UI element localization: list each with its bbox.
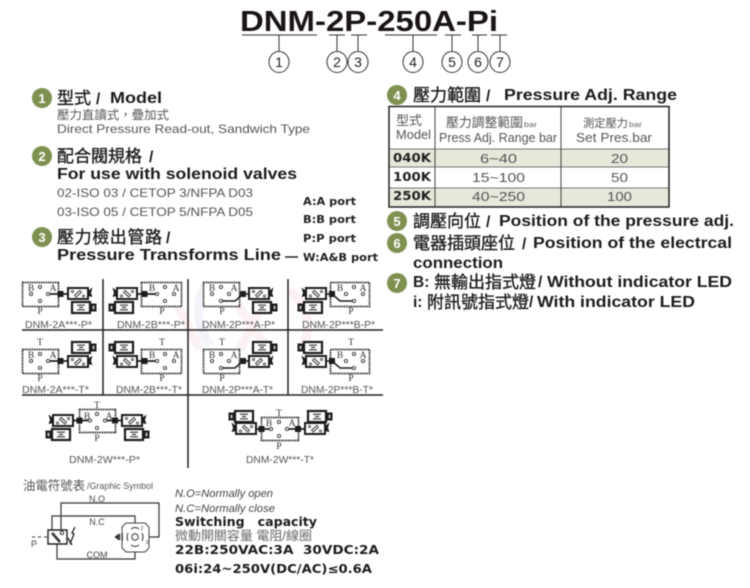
section 6: electrical connection: Position of the electrcal bbox=[533, 235, 732, 252]
row 040K: 20 bbox=[611, 151, 628, 166]
note: normally open: N.O=Normally open bbox=[175, 488, 273, 500]
diagram: DNM-2A-P bbox=[22, 282, 96, 331]
diagram: DNM-2P-B-P: B bbox=[337, 284, 343, 294]
diagram: DNM-2W-P: T bbox=[94, 401, 100, 411]
section 3: pressure line bbox=[32, 227, 298, 264]
circuit diagram: 3 bbox=[146, 540, 149, 546]
row 250K bbox=[393, 189, 632, 204]
row 100K: 15~100 bbox=[472, 170, 525, 185]
port legend: P:P port bbox=[303, 233, 356, 245]
row 040K: 040K bbox=[393, 151, 432, 165]
table header: 型式 bbox=[396, 113, 422, 128]
code breakdown callouts: 4 bbox=[409, 54, 417, 70]
code breakdown callouts: 1 bbox=[275, 54, 283, 70]
diagram: DNM-2P-A-T: DNM-2P***A-T* bbox=[202, 385, 273, 396]
badge 5: 5 bbox=[393, 214, 401, 229]
spec: 22B: 22B:250VAC:3A 30VDC:2A bbox=[175, 543, 380, 557]
diagram: DNM-2P-A-T: P bbox=[219, 374, 225, 384]
diagram: DNM-2P-A-P: B bbox=[209, 284, 215, 294]
diagram: DNM-2P-B-P bbox=[298, 282, 375, 331]
heading: valve spec english: For use with solenoid valves bbox=[57, 166, 297, 183]
diagram: DNM-2P-A-P bbox=[202, 282, 278, 331]
section 5: adjustment position bbox=[387, 211, 734, 231]
heading: slash: / bbox=[149, 149, 154, 166]
note: normally close: N.C=Normally close bbox=[175, 503, 275, 515]
diagram: DNM-2B-T: T bbox=[159, 338, 165, 348]
graphic symbol heading: 油電符號表 bbox=[23, 478, 85, 493]
section 7: indicator LED: i: bbox=[413, 294, 422, 311]
diagram: DNM-2W-T: A bbox=[289, 419, 296, 429]
diagram: DNM-2A-T: P bbox=[37, 374, 43, 384]
diagram: DNM-2P-A-T: A bbox=[231, 351, 238, 361]
section 7: indicator LED: Without indicator LED bbox=[547, 274, 732, 291]
diagram: DNM-2P-A-T bbox=[202, 338, 278, 396]
title: model code: DNM-2P-250A-Pi bbox=[240, 6, 498, 38]
table header: Press Adj. Range bar bbox=[439, 130, 558, 145]
row 100K: 100K bbox=[393, 170, 432, 184]
port legend: W:A&B port bbox=[303, 252, 378, 264]
diagram: DNM-2P-B-T: DNM-2P***B-T* bbox=[301, 385, 373, 396]
row 100K: 50 bbox=[611, 170, 628, 185]
badge 2 bbox=[32, 146, 52, 166]
section 7: indicator LED: / bbox=[538, 274, 543, 291]
row 040K: 6~40 bbox=[480, 151, 517, 166]
heading: slash: / bbox=[486, 88, 491, 105]
table header: 壓力調整範圍 bbox=[446, 115, 523, 130]
badge 4 bbox=[387, 85, 407, 105]
port legend: A:A port bbox=[303, 196, 356, 208]
code breakdown callouts: 6 bbox=[474, 54, 482, 70]
diagram: DNM-2B-T: P bbox=[159, 374, 165, 384]
table header bbox=[396, 113, 653, 145]
badge 1: 1 bbox=[38, 91, 46, 106]
text: switching capacity chinese: 微動開關容量 電阻/線圈 bbox=[175, 528, 312, 543]
diagram: DNM-2B-T: B bbox=[149, 351, 155, 361]
circuit diagram: N.O bbox=[89, 494, 105, 504]
pressure range table bbox=[389, 106, 669, 207]
diagram: DNM-2A-P: A bbox=[50, 284, 57, 294]
code breakdown callouts bbox=[242, 35, 510, 72]
graphic symbol heading: /Graphic Symbol bbox=[87, 481, 153, 491]
heading: slash: / bbox=[96, 91, 101, 108]
heading: pressure line english: Pressure Transforms Line bbox=[57, 247, 281, 264]
badge 2: 2 bbox=[38, 149, 46, 164]
heading: valve spec chinese: 配合閥規格 bbox=[57, 147, 142, 166]
port legend bbox=[303, 196, 378, 264]
diagram: DNM-2A-T: B bbox=[28, 351, 34, 361]
diagram: DNM-2W-T: T bbox=[276, 409, 282, 419]
diagram: DNM-2A-T: T bbox=[37, 338, 43, 348]
diagram: DNM-2W-P: A bbox=[106, 412, 113, 422]
diagram: DNM-2B-P: DNM-2B***-P* bbox=[117, 320, 185, 331]
diagram: DNM-2W-P: DNM-2W***-P* bbox=[69, 455, 140, 466]
diagram: DNM-2A-P: B bbox=[28, 284, 34, 294]
code breakdown callouts: 7 bbox=[496, 54, 504, 70]
diagram: DNM-2P-B-T: P bbox=[348, 374, 354, 384]
section 6: electrical connection: connection bbox=[413, 255, 503, 272]
diagram: DNM-2P-A-T: B bbox=[209, 351, 215, 361]
badge 3 bbox=[32, 227, 52, 247]
badge 5 bbox=[387, 211, 407, 231]
section 7: indicator LED: 附訊號指式燈 bbox=[427, 293, 529, 312]
port legend: B:B port bbox=[303, 214, 356, 226]
section 7: indicator LED: 無輸出指式燈 bbox=[434, 273, 536, 292]
section 6: electrical connection bbox=[387, 233, 732, 272]
diagram: DNM-2W-P: B bbox=[84, 412, 90, 422]
text: model type english: Direct Pressure Read-out, Sandwich Type bbox=[57, 122, 310, 136]
row 250K: 100 bbox=[607, 189, 632, 204]
graphic symbol heading bbox=[23, 478, 153, 493]
heading: slash: / bbox=[166, 230, 171, 247]
table header: bar bbox=[629, 122, 643, 129]
badge 7 bbox=[387, 273, 407, 293]
text: ISO 03: 02-ISO 03 / CETOP 3/NFPA D03 bbox=[57, 186, 253, 200]
section 5: adjustment position: Position of the pressure adj. bbox=[499, 213, 734, 230]
watermark bbox=[175, 285, 308, 350]
code breakdown callouts: 2 bbox=[333, 54, 341, 70]
diagram: DNM-2P-B-T: T bbox=[348, 338, 354, 348]
circuit diagram: COM bbox=[86, 550, 108, 560]
diagram: DNM-2W-T: DNM-2W***-T* bbox=[246, 455, 314, 466]
badge 6: 6 bbox=[393, 236, 401, 251]
section 6: electrical connection: / bbox=[522, 236, 527, 253]
diagram: DNM-2B-P: A bbox=[173, 284, 180, 294]
row 040K bbox=[393, 151, 628, 166]
diagram: DNM-2P-B-P: A bbox=[360, 284, 367, 294]
section 7: indicator LED: With indicator LED bbox=[537, 294, 695, 311]
diagram: DNM-2P-A-P: P bbox=[219, 307, 225, 317]
diagram: DNM-2P-A-P: A bbox=[231, 284, 238, 294]
row 250K: 250K bbox=[393, 189, 432, 203]
section 7: indicator LED: / bbox=[529, 294, 534, 311]
table header: bar bbox=[524, 122, 538, 129]
section 2: solenoid valves bbox=[32, 146, 297, 219]
diagram: DNM-2B-P: B bbox=[149, 284, 155, 294]
circuit diagram bbox=[31, 494, 159, 560]
text: ISO 05: 03-ISO 05 / CETOP 5/NFPA D05 bbox=[57, 205, 253, 219]
section 7: indicator LED: B: bbox=[413, 274, 429, 291]
heading: model chinese: 型式 bbox=[57, 89, 91, 108]
circuit diagram: 2 bbox=[141, 526, 144, 532]
badge 1 bbox=[32, 88, 52, 108]
diagram: DNM-2W-T bbox=[228, 409, 332, 466]
table header: 測定壓力 bbox=[583, 116, 628, 130]
diagram: DNM-2B-T: DNM-2B***-T* bbox=[116, 385, 182, 396]
badge 4: 4 bbox=[393, 88, 401, 103]
diagram: DNM-2W-T: P bbox=[276, 442, 282, 452]
circuit diagram: N.C bbox=[89, 517, 105, 527]
code breakdown callouts: 3 bbox=[354, 54, 362, 70]
diagram: DNM-2P-B-T: A bbox=[360, 351, 367, 361]
diagram: DNM-2W-T: B bbox=[266, 419, 272, 429]
section 5: adjustment position: 調壓向位 bbox=[413, 212, 481, 231]
heading: pressure line chinese: 壓力檢出管路 bbox=[57, 228, 162, 247]
diagram: DNM-2P-A-T: T bbox=[219, 338, 225, 348]
diagram: DNM-2A-P: P bbox=[37, 307, 43, 317]
heading english: Pressure Adj. Range bbox=[504, 87, 677, 104]
badge 6 bbox=[387, 233, 407, 253]
badge 3: 3 bbox=[38, 230, 46, 245]
diagram: DNM-2P-B-T bbox=[298, 338, 373, 396]
diagram grid lines bbox=[22, 279, 383, 468]
diagram: DNM-2P-B-T: B bbox=[337, 351, 343, 361]
text: model type chinese: 壓力直讀式，疊加式 bbox=[57, 108, 169, 122]
circuit diagram: P bbox=[31, 539, 37, 549]
diagram: DNM-2W-P: P bbox=[94, 434, 100, 444]
heading chinese: 壓力範圍 bbox=[413, 86, 481, 105]
row 250K: 40~250 bbox=[472, 189, 525, 204]
code breakdown callouts: 5 bbox=[448, 54, 456, 70]
heading: switching capacity: Switching capacity bbox=[175, 515, 317, 529]
spec: 06i: 06i:24~250V(DC/AC)≤0.6A bbox=[175, 562, 373, 576]
section 5: adjustment position: / bbox=[486, 214, 491, 231]
section 4: pressure range heading bbox=[387, 85, 677, 105]
section 6: electrical connection: 電器插頭座位 bbox=[413, 234, 515, 253]
row 100K bbox=[393, 170, 628, 185]
diagram: DNM-2B-T: A bbox=[173, 351, 180, 361]
diagram: DNM-2P-B-P: P bbox=[348, 307, 354, 317]
section 1: model bbox=[32, 88, 310, 136]
table header: Set Pres.bar bbox=[576, 130, 653, 145]
diagram: DNM-2P-A-P: DNM-2P***A-P* bbox=[202, 320, 275, 331]
diagram: DNM-2W-P bbox=[46, 401, 150, 466]
diagram: DNM-2A-T: A bbox=[50, 351, 57, 361]
table header: Model bbox=[396, 127, 431, 142]
badge 7: 7 bbox=[393, 276, 401, 291]
diagram: DNM-2P-B-P: DNM-2P***B-P* bbox=[302, 320, 375, 331]
diagram: DNM-2A-T bbox=[22, 338, 96, 396]
diagram: DNM-2A-P: DNM-2A***-P* bbox=[25, 320, 92, 331]
diagram: DNM-2B-P: P bbox=[159, 307, 165, 317]
section 7: indicator LED bbox=[387, 273, 732, 312]
diagram: DNM-2B-T bbox=[108, 338, 182, 396]
diagram: DNM-2B-P bbox=[108, 282, 185, 331]
diagram: DNM-2A-T: DNM-2A***-T* bbox=[22, 385, 89, 396]
heading: model: Model bbox=[110, 90, 162, 107]
